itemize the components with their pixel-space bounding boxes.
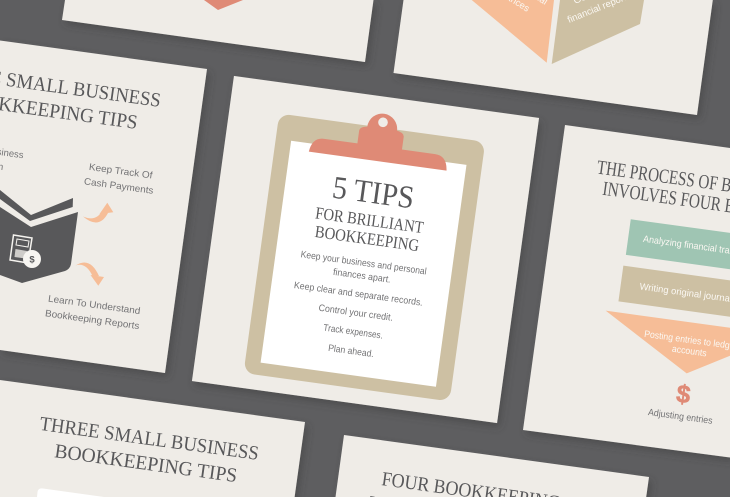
white box: [37, 488, 104, 497]
clipboard paper: [261, 141, 466, 387]
tips list: Control your credit.: [318, 303, 394, 324]
tip: cash payments: Keep Track Of: [88, 162, 153, 182]
icon: calculator: [10, 235, 32, 263]
arrow: up to cash payments: [83, 203, 113, 222]
icon: dollar coin: $: [29, 254, 35, 266]
tips list: [285, 249, 428, 366]
tip: cash payments: Cash Payments: [83, 176, 154, 197]
heading: [35, 413, 260, 490]
tip: reports: [44, 293, 142, 332]
title: 5 tips: 5 TIPS: [330, 169, 416, 215]
clipboard board: [244, 113, 485, 401]
card text: [0, 60, 172, 332]
subtitle: BOOKKEEPING: [314, 222, 420, 255]
icon: dollar sign: $: [675, 380, 692, 409]
heading: BOOKKEEPING TIPS: [53, 440, 238, 487]
step 4 label: Adjusting entries: [647, 407, 713, 427]
subtitle: [312, 203, 425, 256]
arrow: down to reports: [76, 262, 104, 286]
salmon shape: [204, 0, 243, 10]
step 2 bar: [618, 266, 730, 322]
tip: cash payments: [83, 161, 156, 197]
tips list: finances apart.: [332, 267, 391, 286]
step 3 funnel: accounts: [671, 344, 708, 359]
peach arrow block: [472, 0, 554, 63]
tip: reports: Learn To Understand: [47, 294, 141, 317]
tip: reports: Bookkeeping Reports: [44, 308, 140, 332]
panel: bottom-center card: [336, 435, 649, 497]
tan arrow block: [552, 0, 644, 64]
step 1 bar: [626, 219, 730, 276]
tips list: Keep your business and personal: [300, 249, 427, 277]
subtitle: FOR BRILLIANT: [314, 203, 425, 237]
panel: bottom-left card: [0, 380, 305, 497]
step 3 funnel: [599, 311, 730, 385]
tip: business plan: [0, 140, 24, 176]
tips list: Track expenses.: [323, 323, 384, 342]
tips list: Keep clear and separate records.: [293, 280, 423, 309]
panel: center card, 5 tips: [192, 76, 539, 423]
clipboard: [244, 100, 487, 401]
icon: wallet: [0, 190, 78, 283]
panel: top-left card: [62, 0, 374, 62]
panel: top-right card: [394, 0, 713, 115]
heading: [0, 60, 162, 137]
tips list: Plan ahead.: [327, 343, 374, 360]
panel: left card, small business tips: [0, 40, 207, 373]
heading: THREE SMALL BUSINESS: [38, 413, 260, 465]
clipboard clip: [309, 104, 453, 171]
panel: right card, process of bookkeeping: [523, 125, 730, 458]
